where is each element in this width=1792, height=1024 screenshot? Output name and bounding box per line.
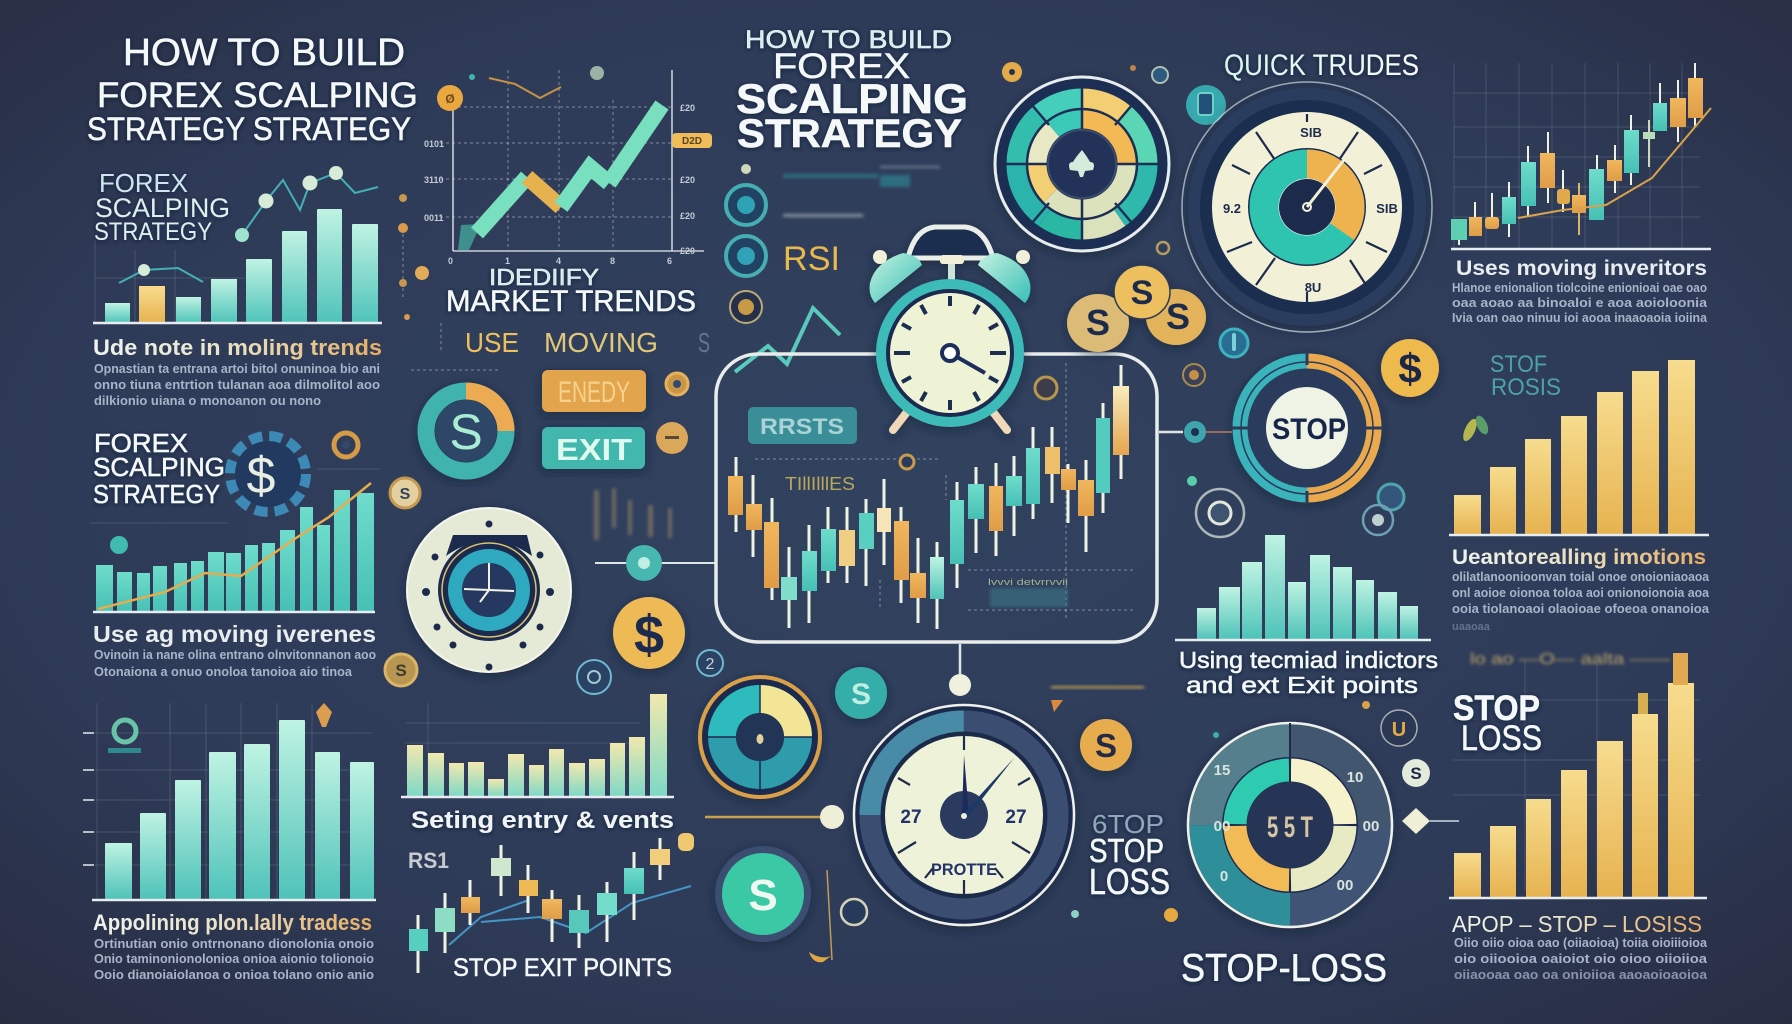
clock hand [942,345,985,373]
grid [1454,63,1700,249]
icon: small top pins [1002,62,1169,254]
stop loss small label [1089,809,1170,902]
small labels [785,377,1068,607]
panel: second forex scalping strategy chart [90,428,380,679]
body text [1452,280,1708,325]
clock bells [870,253,1030,303]
stop loss small label: STOP [1089,832,1164,869]
axis labels: £20 [680,246,695,256]
main title: left [87,32,418,147]
RSI button: RRSTS [760,414,844,439]
axis labels: £20 [680,211,695,221]
icon: stop ring: STOP [1272,413,1346,446]
panel heading: FOREX [94,428,188,458]
icon: outlined circles [577,650,723,694]
body text: Onio taminonionolonioa onioa aionio tolionoio [94,951,374,966]
icon: donut side markers: U [1392,719,1406,741]
icon: indicator circles and RSI [726,164,840,323]
clock body [876,279,1024,427]
icon: coins beside buttons [656,373,688,454]
body text: oaa aoao aa binoaloi e aoa aoioloonia [1452,295,1708,310]
main title: center: STRATEGY [737,112,962,156]
body text [94,361,380,408]
body text: Ivia oan oao ninuu ioi aooa inaaoaoia ioiina [1452,310,1708,325]
trend lines with markers [119,166,378,283]
dial labels [900,807,1027,879]
gold pin [437,85,463,111]
bar chart [92,720,376,900]
gauge donut [1249,133,1365,265]
faded label: ROSIS [1491,374,1561,401]
body text: Opnastian ta entrana artoi bitol onuninoa bio ani [94,361,380,376]
gauge labels: SIB [1300,125,1322,140]
icon: dollar coin stack: S [1166,296,1190,337]
panel heading: SCALPING [95,193,230,223]
small marks [1051,686,1178,922]
icon: mint dollar button [715,846,811,942]
icon: gold S coin [1080,719,1132,771]
text heading: Appolining plon.lally tradess [93,910,372,935]
blurred subtitle smudge [783,166,940,217]
icon: donut side markers: S [1410,764,1422,783]
icon: side small icons [1183,329,1404,537]
connector node [595,545,716,581]
panel heading: STRATEGY [93,479,220,509]
stop loss small label: LOSS [1089,861,1170,902]
decorative pins column [398,194,498,370]
candlesticks [1451,63,1711,249]
panel: applying chart [83,703,376,982]
bar chart with gold trend line [90,469,380,612]
axis labels: 1 [505,256,510,266]
axis labels: 0 [448,256,453,266]
donut labels: 10 [1347,769,1363,786]
icon: leaf [1460,414,1491,443]
grid [440,70,672,251]
dotted guides [755,363,1133,620]
body text [1454,935,1708,982]
gold pin [316,703,332,727]
icon: dollar dashed ring [230,436,306,512]
icon: side coins: S [395,661,407,680]
grid [95,703,372,900]
text heading: Uses moving inveritors [1456,257,1707,280]
gold pin: Ø [445,92,455,106]
icon: zigzag line [735,308,840,372]
panel: forex scalping strategy bar chart [93,166,382,408]
icon: stop-loss donut [1188,723,1392,927]
gold label pill [672,133,712,148]
icon: dollar dashed ring: $ [247,447,276,505]
chart heading: MARKET TRENDS [446,285,696,318]
stop-loss caption: STOP-LOSS [1181,947,1387,990]
body text: Ooio dianoiaiolanoa o onioa tolano onio anio [94,967,374,982]
small labels: lvvvi detvrrvvii [988,577,1068,587]
text heading [1179,647,1438,698]
button: exit [542,427,645,469]
panel: technical indicators bar chart [1175,535,1438,698]
panel heading [94,168,230,246]
text heading: and ext Exit points [1186,672,1418,698]
small labels: TIllIlllES [785,474,855,494]
dial labels: 27 [900,807,922,828]
panel heading: FOREX [99,168,188,198]
gauge ticks [1227,114,1387,302]
dial hub and hands [940,755,1014,839]
icon: gold S coin: S [1095,727,1117,764]
chart heading: IDEDIIFY [489,264,599,290]
panel heading [93,428,225,509]
body text: Ortinutian onio ontrnonano dionolonia onoio [94,936,374,951]
dial labels: 27 [1005,807,1027,828]
icon: round clock dial [407,508,571,672]
panel heading: STOP [1453,689,1540,728]
donut labels: 00 [1363,818,1379,835]
main title: left: HOW TO BUILD [123,32,405,74]
gauge labels: 9.2 [1223,201,1241,216]
panel: uses moving indicators candlestick chart [1451,63,1711,325]
body text: Ovinoin ia nane olina entrano olnvitonnanon aoo [94,647,376,662]
bar chart [1175,535,1431,640]
button: exit: EXIT [556,432,632,467]
icon: small ring and marks [809,870,867,962]
faded label: STOF [1490,351,1547,378]
panel heading: SCALPING [93,452,225,482]
bar chart [93,209,382,323]
main title: left: STRATEGY STRATEGY [87,111,411,147]
panel heading [1453,689,1542,758]
bar chart [1449,360,1709,535]
axis labels: 0011 [424,213,444,223]
icon: dollar coin stack: S [1086,302,1110,343]
text heading: Using tecmiad indictors [1179,647,1438,673]
rising trend arrow [458,105,662,250]
faint candlesticks [594,488,672,540]
grid [1453,660,1700,890]
button: entry [542,370,646,412]
donut labels: 0 [1220,868,1228,885]
icon: teal coin: S [851,678,871,711]
donut labels: 00 [1214,818,1230,835]
body text [94,647,376,679]
clock knobs [873,250,1030,280]
use moving label [465,327,710,358]
icon: side coins [385,478,420,686]
axis labels: £20 [680,103,695,113]
icon: teal badge [1186,85,1226,125]
icon: segmented pie dial [990,72,1174,256]
faded label [1490,351,1561,401]
text heading: Seting entry & vents [411,807,674,834]
body text: Hlanoe enionalion tiolcoine enionioai oae oao [1452,280,1707,295]
connectors [960,432,1183,675]
icon: gold dollar coin right: $ [1398,345,1422,392]
icon: stop ring [1232,352,1384,504]
gauge labels [1223,125,1398,295]
icon: alarm clock [870,227,1030,430]
top squiggle [469,66,604,98]
icon: dollar coin stack [1067,265,1206,352]
use moving label: USE [465,327,519,358]
candlesticks [728,365,1129,629]
panel: stop rosis gold bars [1449,351,1710,633]
body text: oio oiiooioa oaioiot oio oioo oiioiioa [1454,951,1708,966]
dial labels: PROTTE [931,860,997,879]
icon: gold swirl [334,433,358,457]
donut labels: 5 5 T [1267,811,1313,844]
axis ticks [83,733,94,865]
text heading: APOP – STOP – LOSISS [1452,911,1702,937]
RSI label: RS1 [408,848,449,873]
body text: onno tiuna entrtion tulanan aoa dilmolitol aoo [94,377,380,392]
body text: Otonaiona a onuo onoloa tanoioa aio tinoa [94,664,353,679]
quick trades label: QUICK TRUDES [1224,49,1419,82]
main title: center: FOREX [773,47,910,86]
icon: dollar ring [426,391,506,471]
clock ticks [894,296,1006,410]
icon: indicator circles and RSI: RSI [783,240,840,278]
body text: uaaoaa [1452,621,1491,633]
icon: segmented donut [700,677,820,797]
body text: olilatlanoonioonvan toial onoe onoioniaoaoa [1452,569,1710,584]
main title: left: FOREX SCALPING [97,76,418,115]
body text: dilkionio uiana o monoanon ou nono [94,393,321,408]
icon: mint dollar button: S [748,871,778,920]
gauge: quick trades [1182,82,1432,332]
panel: stop loss gold bars [1449,651,1708,982]
candlestick chart [409,833,694,973]
text heading: Ueantorealling imotions [1452,546,1706,569]
icon: dollar ring: S [449,404,483,460]
icon: donut side markers [1213,701,1459,834]
body text: ooia tiolanoaoi olaoioae ofoeoa onanoioa [1452,601,1710,616]
panel: identify market trends chart [424,66,712,358]
icon: gold dollar coin: $ [634,605,664,665]
donut labels: 00 [1337,877,1353,894]
axis labels [424,103,695,266]
panel heading: LOSS [1461,719,1542,758]
use moving label: MOVING [544,327,658,358]
icon: teal coin [835,667,887,719]
axis labels: 3110 [424,175,444,185]
grid [405,703,640,795]
blurred top caption: lo ao —O— aalta —— [1470,651,1670,668]
main title: center: HOW TO BUILD [745,26,952,54]
dial ticks [898,736,1030,895]
panel: setting entry and exit [401,694,694,982]
body text [1452,569,1710,633]
body text: oiiaooaa oao oa onioiioa aaoaoioaoioa [1454,967,1708,982]
icon: gold dollar coin [613,597,685,669]
axis labels: 6 [667,256,672,266]
text heading: Ude note in moling trends [93,335,382,360]
connector: gauge node [705,805,844,829]
axes [453,70,704,251]
chart heading [446,264,696,318]
RSI button [748,407,857,444]
bar chart [1449,653,1707,898]
panel frame [716,354,1157,642]
donut labels: 15 [1214,762,1230,779]
gauge labels: SIB [1376,201,1398,216]
axis labels: 0101 [424,139,444,149]
axis labels: 8 [610,256,615,266]
clock handle [908,227,993,258]
use moving label: S [698,327,710,358]
body text: onl aoioe oionoa toloa aoi onionoionoia aoa [1452,585,1710,600]
teal pin [110,536,128,554]
gold label pill: D2D [682,136,702,147]
bar chart [401,694,674,797]
donut labels [1214,762,1379,894]
icon: teal emblem [108,720,141,753]
panel heading: STRATEGY [94,218,212,246]
icon: dollar coin stack: S [1131,274,1153,312]
main title: center [736,26,968,156]
gauge: profit dial [854,705,1074,925]
axis labels: 4 [556,256,561,266]
body text [94,936,374,982]
icon: outlined circles: 2 [706,656,715,673]
main title: center: SCALPING [736,75,968,122]
button: entry: ENEDY [558,376,630,409]
connector node: center [949,674,971,696]
gauge labels: 8U [1305,280,1321,295]
exit points label: STOP EXIT POINTS [453,954,672,982]
text heading: Use ag moving iverenes [93,621,376,647]
icon: side coins: S [400,486,411,503]
body text: Oiio oiio oioa oao (oiiaoioa) toiia oioiiioioa [1454,935,1708,950]
panel: central candlestick chart [716,354,1183,675]
connector node [1184,421,1232,443]
stop loss small label: 6TOP [1092,809,1164,839]
icon: gold dollar coin right [1381,339,1439,397]
axis labels: £20 [680,175,695,185]
clock feet [893,412,1007,430]
